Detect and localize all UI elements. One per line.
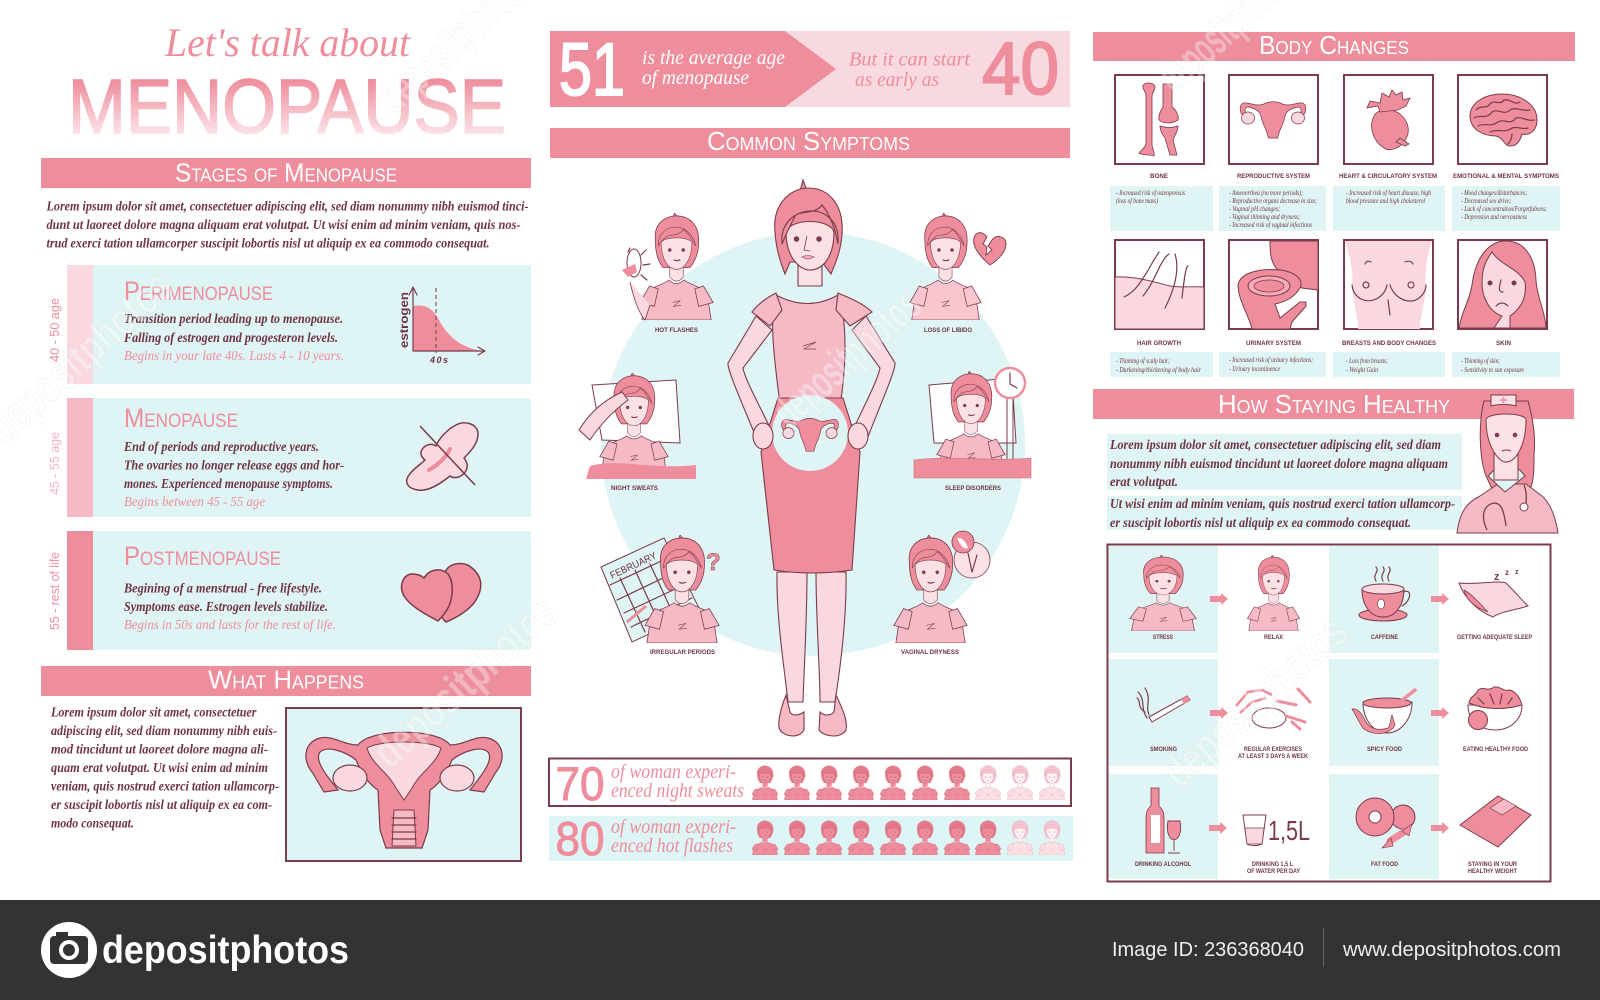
item: relax: RELAX bbox=[1264, 634, 1284, 641]
text block: stages intro: trud exerci tation ullamcorper suscipit lobortis nisl ut aliquip ex ea commodo consequat. bbox=[46, 236, 490, 250]
diagram: reproductive system bbox=[286, 708, 521, 861]
symptom: sleep disorders bbox=[914, 368, 1031, 492]
item: smoking bbox=[1137, 688, 1190, 753]
card: bone bbox=[1110, 75, 1213, 231]
card: emotional and mental symptoms: - Depression and nervousness bbox=[1461, 213, 1527, 221]
item: fat food bbox=[1356, 798, 1415, 868]
symptom: loss of libido bbox=[910, 213, 1006, 334]
item: spicy food: SPICY FOOD bbox=[1367, 746, 1402, 753]
arrow bbox=[1431, 707, 1449, 719]
item: healthy weight: STAYING IN YOUR bbox=[1468, 861, 1517, 868]
card: breasts and body changes: - Loss from breasts; bbox=[1346, 357, 1388, 365]
panel: postmenopause: Begins in 50s and lasts for the rest of life. bbox=[124, 617, 336, 632]
text block: what happens: adipiscing elit, sed diam nonummy nibh euis- bbox=[51, 723, 277, 738]
item: drinking water bbox=[1243, 815, 1310, 875]
panel: perimenopause bbox=[47, 265, 531, 384]
text block: healthy intro: Lorem ipsum dolor sit amet, consectetuer adipiscing elit, sed diam bbox=[1109, 437, 1441, 452]
item: stress bbox=[1130, 555, 1196, 641]
card: bone: - Increased risk of osteoporosis bbox=[1116, 189, 1185, 197]
card: skin: SKIN bbox=[1496, 340, 1511, 347]
panel: perimenopause: Falling of estrogen and progesteron levels. bbox=[123, 330, 338, 345]
icon: question mark: ? bbox=[706, 549, 721, 576]
text: depositphotos bbox=[762, 278, 930, 437]
text block: stages intro: Lorem ipsum dolor sit amet, consectetuer adipiscing elit, sed diam nonummy nibh euismod tinci- bbox=[46, 198, 529, 214]
item: getting adequate sleep: z bbox=[1505, 568, 1509, 577]
item: fat food: FAT FOOD bbox=[1371, 861, 1398, 868]
card: emotional and mental symptoms: - Mood changes/disturbances; bbox=[1461, 189, 1527, 197]
card: heart and circulatory system bbox=[1333, 75, 1445, 231]
panel: lifestyle grid bbox=[1108, 544, 1550, 882]
card: urinary system: URINARY SYSTEM bbox=[1246, 340, 1301, 347]
card: bone: BONE bbox=[1150, 173, 1169, 180]
text: depositphotos bbox=[362, 585, 568, 777]
item: getting adequate sleep: z bbox=[1515, 569, 1519, 576]
panel: perimenopause: 40 - 50 age bbox=[47, 298, 62, 362]
panel: what happens bbox=[41, 664, 531, 861]
pictogram: 7 of 10 women bbox=[752, 765, 1065, 800]
chart: estrogen curve: estrogen bbox=[397, 292, 411, 348]
panel: postmenopause: Begining of a menstrual - free lifestyle. bbox=[123, 580, 322, 596]
item: healthy weight bbox=[1460, 796, 1531, 875]
panel: perimenopause: Perimenopause bbox=[124, 276, 273, 306]
text block: healthy intro: Ut wisi enim ad minim veniam, quis nostrud exerci tation ullamcorp- bbox=[1110, 496, 1455, 511]
stat: 70 night sweats: of woman experi- bbox=[611, 761, 736, 783]
arrow bbox=[1209, 822, 1227, 834]
banner: average age: 40 bbox=[982, 27, 1059, 110]
chart: estrogen curve: 40s bbox=[429, 355, 448, 365]
card: skin bbox=[1452, 240, 1560, 377]
card: reproductive system: - Vaginal thinning and dryness; bbox=[1229, 213, 1300, 221]
card: emotional and mental symptoms: - Lack of concentration/Forgetfulness; bbox=[1461, 205, 1547, 213]
item: drinking alcohol bbox=[1135, 788, 1191, 868]
panel: stages of menopause bbox=[41, 158, 531, 650]
card: bone: (loss of bone mass) bbox=[1116, 197, 1159, 205]
text block: what happens: quam erat volutpat. Ut wisi enim ad minim bbox=[51, 760, 268, 775]
item: stress: STRESS bbox=[1153, 634, 1174, 641]
text block: healthy intro bbox=[1107, 434, 1462, 530]
figure: central woman bbox=[728, 180, 895, 736]
card: hair growth bbox=[1110, 240, 1213, 377]
banner: average age: as early as bbox=[855, 69, 939, 91]
panel: menopause bbox=[47, 398, 531, 517]
text block: healthy intro: nonummy nibh euismod tincidunt ut laoreet dolore magna aliquam bbox=[1110, 456, 1448, 471]
banner: average age: is the average age bbox=[642, 47, 785, 69]
symptom: loss of libido: LOSS OF LIBIDO bbox=[924, 327, 972, 334]
footer: depositphotos bar: Image ID: 236368040 bbox=[1112, 939, 1304, 961]
card: urinary system bbox=[1219, 240, 1326, 377]
item: drinking water: 1,5L bbox=[1268, 815, 1310, 846]
item: caffeine bbox=[1359, 567, 1410, 641]
panel: postmenopause: 55 - rest of life bbox=[47, 552, 62, 630]
symptom: hot flashes bbox=[622, 213, 713, 334]
banner: average age bbox=[550, 27, 1070, 111]
card: heart and circulatory system: HEART & CIRCULATORY SYSTEM bbox=[1339, 173, 1437, 180]
panel: postmenopause: Symptoms ease. Estrogen levels stabilize. bbox=[124, 599, 328, 614]
symptom: sleep disorders: SLEEP DISORDERS bbox=[945, 485, 1002, 492]
card: reproductive system bbox=[1219, 75, 1326, 231]
item: getting adequate sleep: z bbox=[1494, 571, 1500, 583]
item: drinking water: DRINKING 1,5 L bbox=[1252, 861, 1293, 868]
card: reproductive system: - Vaginal pH changes; bbox=[1229, 205, 1280, 213]
panel: menopause: End of periods and reproductive years. bbox=[123, 439, 319, 454]
panel: perimenopause: Transition period leading up to menopause. bbox=[124, 311, 343, 326]
card: hair growth: HAIR GROWTH bbox=[1137, 340, 1181, 347]
item: eating healthy food: EATING HEALTHY FOOD bbox=[1463, 746, 1528, 753]
text block: what happens: modo consequat. bbox=[51, 816, 134, 830]
text block: what happens bbox=[50, 704, 279, 830]
background circle bbox=[601, 232, 1025, 656]
item: relax bbox=[1247, 555, 1300, 641]
arrow bbox=[1210, 707, 1228, 719]
footer: depositphotos bar bbox=[0, 900, 1600, 1000]
item: regular exercises: AT LEAST 3 DAYS A WEEK bbox=[1238, 753, 1308, 760]
text block: what happens: veniam, quis nostrud exerci tation ullamcorp- bbox=[51, 778, 279, 794]
heading bar: how staying healthy: How Staying Healthy bbox=[1218, 389, 1450, 419]
heading bar: body changes bbox=[1093, 30, 1575, 61]
card: hair growth: - Darkening/thickening of body hair bbox=[1116, 366, 1201, 374]
symptom: hot flashes: HOT FLASHES bbox=[655, 327, 699, 334]
icon: calendar: FEBRUARY bbox=[609, 550, 659, 582]
panel: perimenopause: Begins in your late 40s. Lasts 4 - 10 years. bbox=[124, 348, 344, 363]
footer: depositphotos bar: www.depositphotos.com bbox=[1342, 939, 1561, 961]
card: heart and circulatory system: blood pressure and high cholesterol bbox=[1346, 197, 1425, 205]
text block: healthy intro: er suscipit lobortis nisl ut aliquip ex ea commodo consequat. bbox=[1110, 515, 1411, 530]
panel: postmenopause: Postmenopause bbox=[124, 541, 281, 571]
text block: what happens: Lorem ipsum dolor sit amet, consectetuer bbox=[50, 704, 257, 720]
card: emotional and mental symptoms: EMOTIONAL & MENTAL SYMPTOMS bbox=[1453, 173, 1560, 180]
card: hair growth: - Thinning of scalp hair; bbox=[1116, 357, 1170, 365]
symptom: night sweats: NIGHT SWEATS bbox=[611, 485, 659, 492]
banner: average age: But it can start bbox=[849, 48, 970, 70]
item: getting adequate sleep: GETTING ADEQUATE SLEEP bbox=[1457, 634, 1533, 641]
panel: menopause: Menopause bbox=[124, 403, 238, 433]
arrow bbox=[1431, 822, 1449, 834]
card: reproductive system: REPRODUCTIVE SYSTEM bbox=[1237, 173, 1310, 180]
item: regular exercises: REGULAR EXERCISES bbox=[1244, 746, 1303, 753]
heading bar: common symptoms: Common Symptoms bbox=[707, 126, 910, 156]
stat: 70 night sweats: enced night sweats bbox=[611, 780, 744, 802]
symptom: night sweats bbox=[579, 373, 696, 492]
item: drinking water: OF WATER PER DAY bbox=[1247, 868, 1301, 875]
item: getting adequate sleep bbox=[1457, 568, 1533, 641]
item: caffeine: CAFFEINE bbox=[1371, 634, 1399, 641]
text block: what happens: mod tincidunt ut laoreet dolore magna ali- bbox=[51, 742, 268, 756]
panel: body changes bbox=[1093, 30, 1575, 377]
symptom: vaginal dryness: VAGINAL DRYNESS bbox=[901, 649, 960, 656]
heading bar: body changes: Body Changes bbox=[1259, 30, 1409, 60]
heading bar: stages of menopause bbox=[41, 158, 531, 188]
card: breasts and body changes: - Weight Gain bbox=[1346, 366, 1378, 374]
stat: 80 hot flashes: of woman experi- bbox=[611, 816, 736, 838]
text block: what happens: er suscipit lobortis nisl ut aliquip ex ea com- bbox=[51, 797, 272, 812]
panel: how staying healthy bbox=[1093, 389, 1574, 882]
card: skin: - Sensitivity to sun exposure bbox=[1461, 366, 1524, 374]
text: depositphotos bbox=[1152, 605, 1358, 797]
pictogram: 8 of 10 women bbox=[752, 820, 1065, 855]
symptom: irregular periods: IRREGULAR PERIODS bbox=[650, 649, 716, 656]
item: smoking: SMOKING bbox=[1150, 746, 1177, 753]
icon: broken heart bbox=[974, 233, 1006, 265]
heading bar: stages of menopause: Stages of Menopause bbox=[175, 158, 397, 188]
item: drinking alcohol: DRINKING ALCOHOL bbox=[1135, 861, 1191, 868]
symptom: irregular periods bbox=[601, 535, 721, 656]
text block: stages intro bbox=[46, 198, 529, 250]
card: urinary system: - Urinary incontinence bbox=[1229, 365, 1280, 373]
text block: stages intro: dunt ut laoreet dolore magna aliquam erat volutpat. Ut wisi enim ad minim veniam, quis nos- bbox=[46, 217, 521, 232]
heading bar: how staying healthy bbox=[1093, 389, 1574, 419]
arrow bbox=[1431, 593, 1449, 605]
card: reproductive system: - Reproductive organs decrease in size; bbox=[1229, 197, 1317, 205]
panel: menopause: mones. Experienced menopause symptoms. bbox=[124, 476, 333, 491]
stat: 80 hot flashes: 80 bbox=[556, 812, 604, 865]
title: Let's talk about: Let's talk about bbox=[164, 20, 411, 65]
icon: crossed-out sanitary pad bbox=[407, 423, 478, 490]
card: emotional and mental symptoms bbox=[1452, 75, 1560, 231]
stat: 80 hot flashes: enced hot flashes bbox=[611, 835, 733, 857]
panel: menopause: The ovaries no longer release eggs and hor- bbox=[124, 458, 344, 472]
card: heart and circulatory system: - Increased risk of heart disease, high bbox=[1346, 189, 1431, 197]
item: eating healthy food bbox=[1463, 687, 1528, 753]
panel: menopause: 45 - 55 age bbox=[47, 432, 62, 495]
card: urinary system: - Increased risk of urinary infections; bbox=[1229, 356, 1313, 364]
symptom: vaginal dryness bbox=[894, 531, 990, 656]
card: reproductive system: - Increased risk of vaginal infections bbox=[1229, 221, 1312, 229]
footer: depositphotos bar: depositphotos bbox=[102, 929, 349, 972]
item: healthy weight: HEALTHY WEIGHT bbox=[1468, 868, 1517, 875]
item: spicy food bbox=[1352, 690, 1415, 753]
card: emotional and mental symptoms: - Decreased sex drive; bbox=[1461, 197, 1511, 205]
panel: common symptoms bbox=[550, 126, 1070, 736]
item: regular exercises bbox=[1236, 689, 1310, 760]
heading bar: what happens bbox=[41, 664, 531, 696]
icon: two hearts bbox=[402, 563, 481, 622]
icon: depositphotos camera logo bbox=[41, 922, 97, 978]
chart: estrogen curve bbox=[397, 287, 485, 365]
heading bar: what happens: What Happens bbox=[208, 664, 364, 694]
card: breasts and body changes bbox=[1333, 240, 1445, 377]
card: skin: - Thinning of skin; bbox=[1461, 357, 1500, 365]
figure: nurse bbox=[1457, 395, 1558, 533]
arrow bbox=[1210, 593, 1228, 605]
stat: 70 night sweats bbox=[549, 757, 1071, 810]
title: MENOPAUSE: MENOPAUSE bbox=[68, 64, 506, 150]
banner: average age: 51 bbox=[559, 28, 625, 111]
panel: menopause: Begins between 45 - 55 age bbox=[124, 494, 265, 509]
card: reproductive system: - Amenorrhea (no more periods); bbox=[1229, 189, 1303, 197]
icon: clock bbox=[995, 368, 1025, 398]
stat: 80 hot flashes bbox=[549, 812, 1073, 865]
panel: postmenopause bbox=[47, 531, 531, 650]
banner: average age: of menopause bbox=[642, 67, 749, 89]
card: breasts and body changes: BREASTS AND BODY CHANGES bbox=[1342, 340, 1437, 347]
stat: 70 night sweats: 70 bbox=[556, 757, 604, 810]
heading bar: common symptoms bbox=[550, 126, 1070, 158]
text block: healthy intro: erat volutpat. bbox=[1110, 474, 1178, 489]
